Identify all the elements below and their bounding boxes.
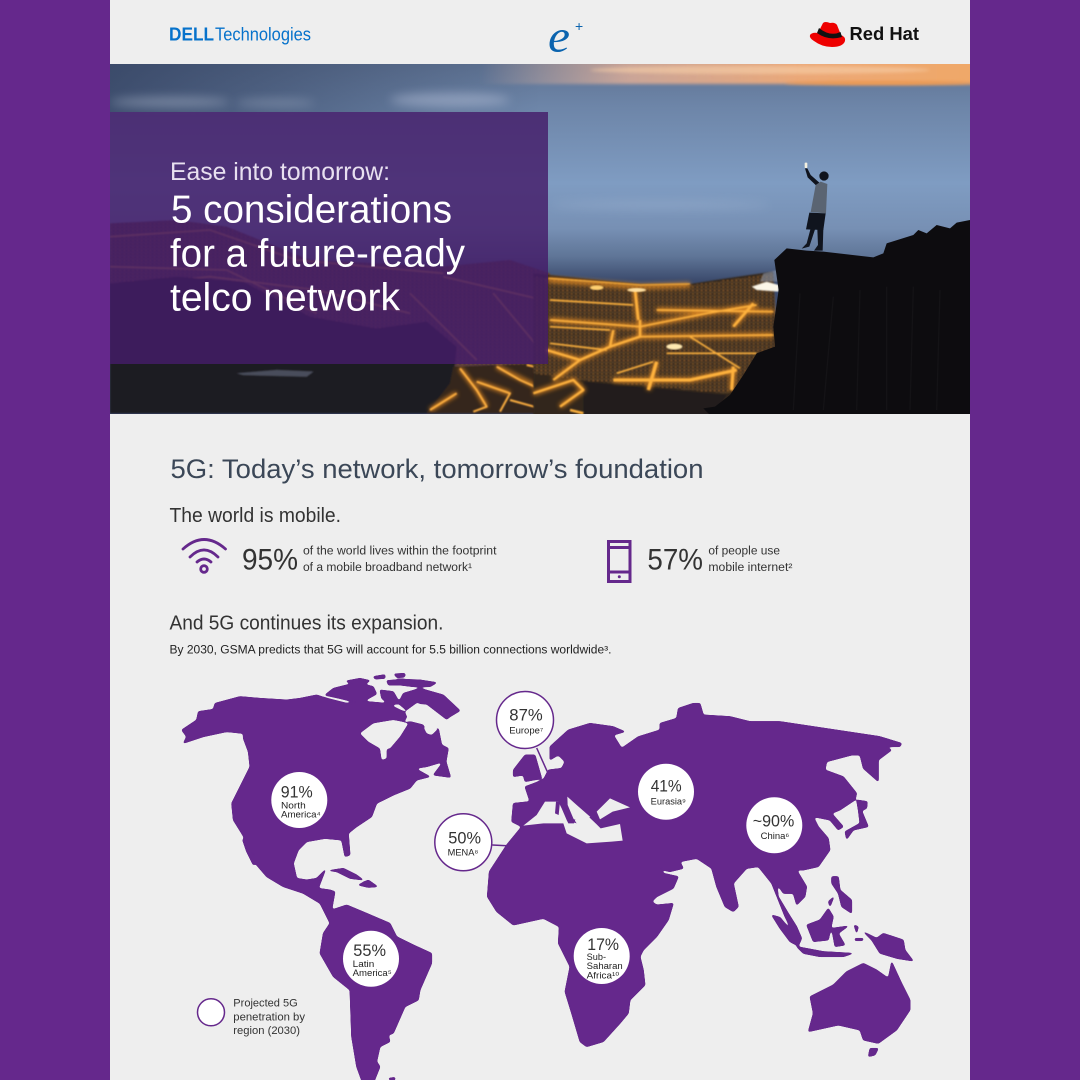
stat: 57% [647,544,793,576]
callout: MENA [435,814,507,871]
callout: MENA: MENA⁸ [448,848,478,858]
hero title: 5 considerations [171,189,452,232]
logo: e+: e [548,12,570,61]
stat: 95%: 95% [242,544,298,576]
hero subtitle: Ease into tomorrow: [170,158,390,186]
callout: Sub-Saharan Africa: Sub- [587,952,606,962]
callout: Sub-Saharan Africa: Africa¹⁰ [587,970,620,980]
page panel [110,0,970,1080]
logo: Dell Technologies: Technologies [215,24,311,44]
hero title: for a future-ready [170,233,465,276]
subheading: the world is mobile: The world is mobile. [170,505,341,527]
logo: Red Hat [810,22,919,47]
callout: Sub-Saharan Africa [574,928,630,984]
callout: China [746,797,802,853]
logo: Dell Technologies: DELL [169,24,214,44]
callout: China: China⁶ [761,831,790,841]
logo: Dell Technologies [169,24,311,44]
stat: 57%: 57% [647,544,703,576]
hero title panel [110,112,548,364]
callout: North America [271,772,327,828]
map: Americas [182,673,460,1080]
hero title: telco network [170,277,400,320]
subheading: 5G expansion: And 5G continues its expansion. [170,612,444,634]
stat: 95%: of the world lives within the footprint [303,545,497,557]
callout: Eurasia: 41% [651,777,682,796]
stat: 57%: of people use [708,545,780,557]
callout: MENA: 50% [448,828,481,847]
legend [198,998,306,1037]
callout: Latin America [343,931,399,987]
legend: penetration by [233,1012,306,1024]
logo: Red Hat: Red Hat [850,24,919,44]
callout: Eurasia: Eurasia⁹ [651,796,686,806]
callout: Sub-Saharan Africa: Saharan [587,961,623,971]
callout: North America: America⁴ [281,809,321,819]
section heading: 5G: Today’s network, tomorrow’s foundation [170,454,704,484]
legend: Projected 5G [233,998,298,1010]
callout: North America: 91% [281,782,313,801]
hero title [170,189,465,320]
callout: Europe: 87% [509,706,543,725]
logo: e+ [548,12,583,61]
callout: Latin America: 55% [353,941,386,960]
legend: region (2030) [233,1025,300,1037]
callout: Eurasia [638,764,694,820]
logo: e+: + [575,18,583,34]
icon: smartphone [608,542,630,582]
callout: Europe [496,692,554,772]
world map [182,673,913,1080]
stat: 95% [242,544,497,576]
icon: wifi [183,540,226,572]
callout: Latin America: Latin [353,959,374,969]
man and cliff silhouette detail [703,220,970,415]
callout: China: ~90% [753,812,794,831]
stat: 95%: of a mobile broadband network¹ [303,562,472,574]
map: Eurasia and Africa [487,703,913,1057]
stat: 57%: mobile internet² [708,562,793,574]
map: Mediterranean and Black Sea [523,797,630,843]
callout: Latin America: America⁵ [353,968,392,978]
hero photo: city at night and man on cliff [110,58,975,415]
callout: Europe: Europe⁷ [509,725,543,735]
map: Hudson Bay [360,703,438,760]
callout: North America: North [281,800,306,810]
body text: GSMA prediction: By 2030, GSMA predicts that 5G will account for 5.5 billion connections worldwide³. [170,644,612,656]
callout: Sub-Saharan Africa: 17% [587,935,619,954]
